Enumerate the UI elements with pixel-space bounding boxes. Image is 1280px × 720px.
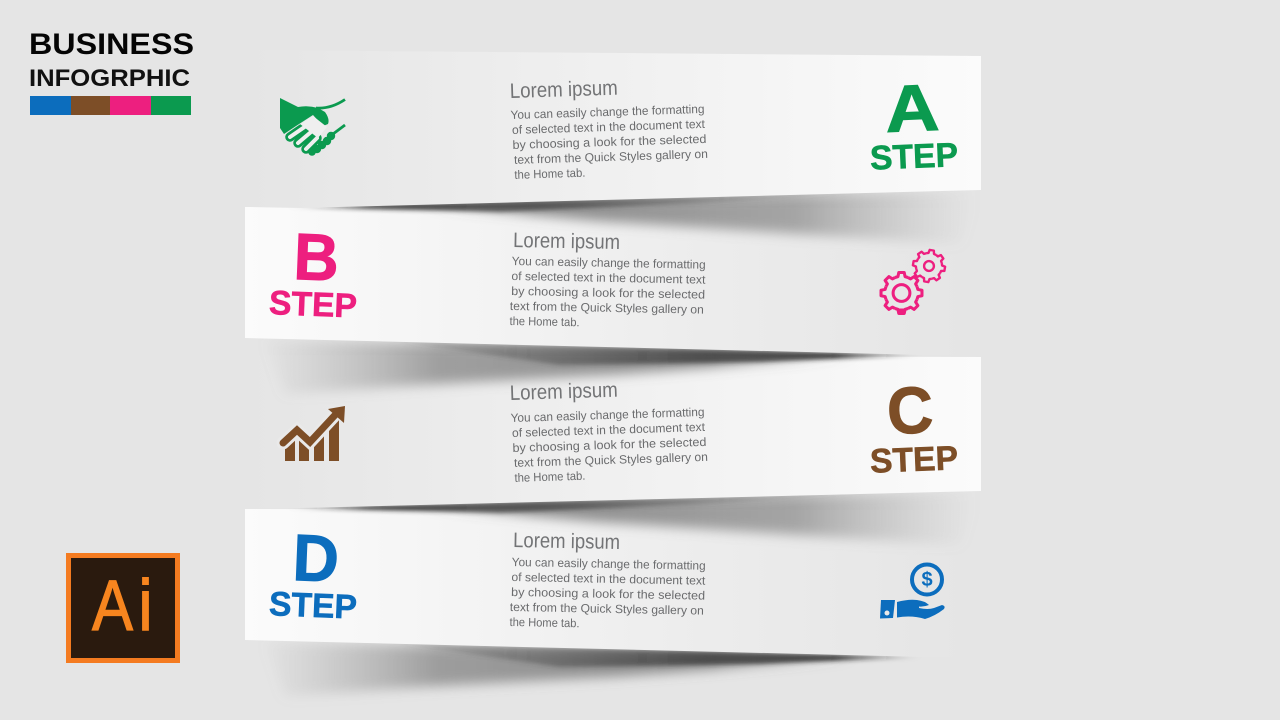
text block: step D: by choosing a look for the selected [511, 585, 705, 603]
text block: step B: the Home tab. [509, 314, 580, 329]
text block: step A: of selected text in the document text [512, 117, 706, 137]
text block: step D: Lorem ipsum [513, 529, 620, 554]
icon: hand holding coin [880, 564, 945, 619]
band C shadow [285, 491, 981, 545]
text block: step C: of selected text in the document text [512, 420, 706, 440]
icon: hand holding coin: $ [921, 569, 933, 591]
band D shadow [265, 642, 925, 696]
text block: step B: Lorem ipsum [513, 229, 620, 254]
band A shadow [285, 190, 981, 244]
step D label [268, 519, 360, 627]
text block: step B: by choosing a look for the selected [511, 284, 705, 302]
icon: gears [881, 247, 948, 313]
step D label: D [291, 520, 340, 596]
text block: step C: Lorem ipsum [509, 379, 618, 405]
text block: step D: text from the Quick Styles gallery on [510, 600, 704, 618]
panel: step C band [250, 355, 981, 509]
text block: step D: You can easily change the formatting [512, 555, 706, 573]
text block: step B [509, 229, 707, 332]
icon: handshake [280, 98, 345, 156]
text block: step C: text from the Quick Styles gallery on [514, 450, 708, 470]
step B label: B [292, 219, 340, 295]
text block: step A [509, 74, 709, 182]
text block: step A: text from the Quick Styles gallery on [514, 147, 708, 167]
step A label [867, 69, 959, 178]
text block: step A: Lorem ipsum [509, 77, 618, 103]
title: BUSINESS [29, 28, 194, 61]
step A label: STEP [869, 136, 959, 178]
icon: Adobe Illustrator logo: A [92, 567, 134, 646]
text block: step C: the Home tab. [514, 469, 586, 485]
text block: step B: of selected text in the document text [511, 269, 706, 287]
icon: growth chart [283, 406, 345, 461]
text block: step C: You can easily change the formatting [510, 405, 705, 425]
icon: Adobe Illustrator logo [68, 556, 178, 660]
title: INFOGRPHIC [29, 65, 190, 92]
text block: step B: You can easily change the formatting [512, 254, 706, 272]
step B label: STEP [268, 284, 358, 326]
band B shadow [265, 340, 925, 394]
text block: step A: You can easily change the formatting [510, 102, 705, 122]
text block: step B: text from the Quick Styles gallery on [510, 299, 704, 317]
step B label [268, 218, 360, 326]
text block: step D: the Home tab. [509, 615, 580, 630]
panel: step A band [250, 50, 981, 208]
panel: step D band [245, 509, 965, 658]
text block: step D [509, 529, 707, 633]
colour key bar [30, 96, 191, 115]
step A label: A [884, 70, 941, 146]
icon: Adobe Illustrator logo: i [139, 567, 152, 646]
title [29, 28, 194, 92]
text block: step D: of selected text in the document text [511, 570, 706, 588]
text block: step A: the Home tab. [514, 166, 586, 182]
text block: step C [509, 376, 709, 485]
step C label: STEP [869, 439, 959, 481]
panel: step B band [245, 207, 965, 356]
text block: step C: by choosing a look for the selected [512, 435, 707, 455]
step D label: STEP [268, 585, 358, 627]
text block: step A: by choosing a look for the selected [512, 132, 707, 152]
step C label: C [886, 372, 935, 448]
step C label [867, 371, 959, 481]
